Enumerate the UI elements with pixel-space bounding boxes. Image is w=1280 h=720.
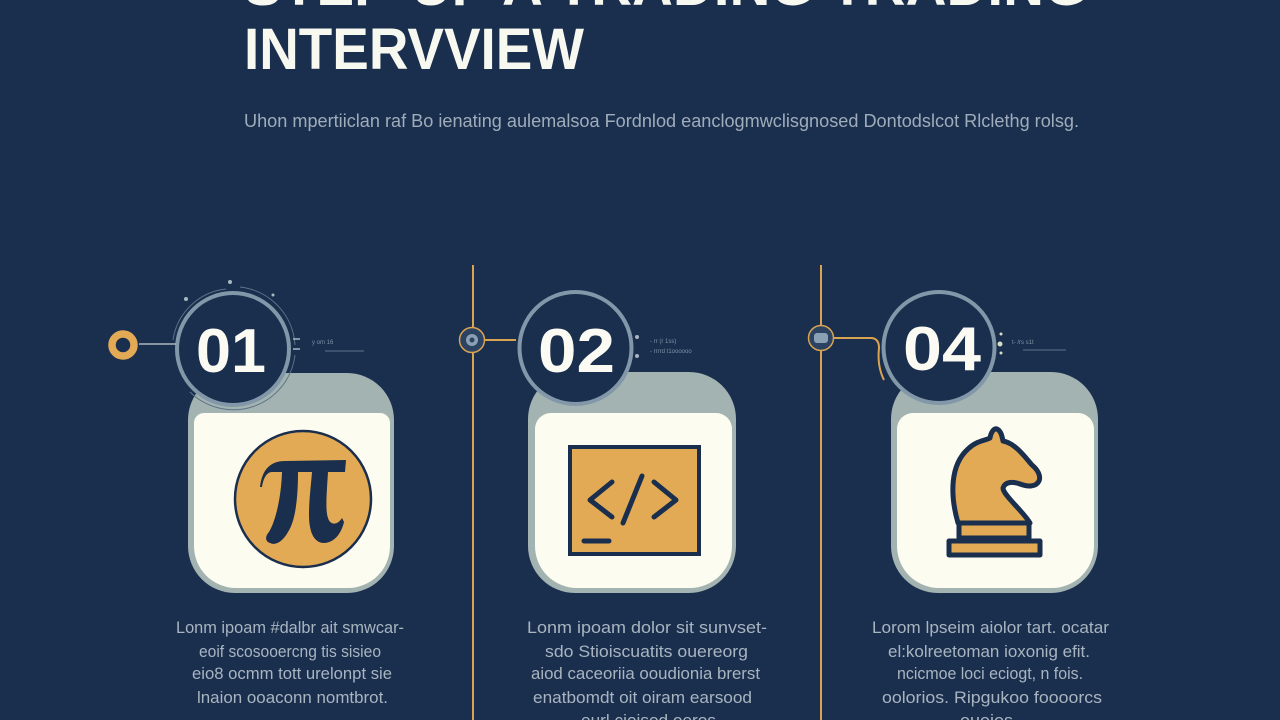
number badge: 04: [884, 292, 994, 403]
connector node: step 02: [460, 328, 484, 352]
description: step 04: el:kolreetoman ioxonig efit.: [888, 642, 1090, 661]
number badge: 02: 02: [538, 317, 615, 386]
connector node: ring: [112, 334, 176, 356]
card: step 01: [188, 373, 394, 593]
description: step 01: Lonm ipoam #dalbr ait smwcar-: [176, 618, 404, 637]
panel: step 02: [460, 292, 767, 720]
icon: chess knight: [949, 429, 1040, 555]
description: step 01: eio8 ocmm tott urelonpt sie: [192, 664, 392, 683]
icon: pi in circle: [235, 431, 371, 567]
tiny annotation: step 02: - rrrrd t1oooooo: [650, 349, 692, 355]
tiny annotation: step 01: y om 16: [312, 340, 334, 346]
description: step 02: Lonm ipoam dolor sit sunvset-: [527, 618, 767, 637]
tiny annotation: step 02: [635, 335, 692, 358]
number badge: 01: 01: [196, 317, 266, 386]
tiny annotation: step 01: [293, 339, 364, 351]
tiny annotation: step 02: - rr (r 1ss): [650, 339, 676, 345]
description: step 01: [176, 618, 404, 707]
connector node: step 04: [808, 326, 834, 350]
description: step 02: enatbomdt oit oiram earsood: [533, 688, 752, 707]
number badge: 02: [520, 292, 632, 404]
description: step 04: Lorom lpseim aiolor tart. ocatar: [872, 618, 1109, 637]
subtitle: Uhon mpertiiclan raf Bo ienating aulemalsoa Fordnlod eanclogmwclisgnosed Dontodslcot Rlclethg rolsg.: [244, 111, 1079, 131]
connector line: column 3: [821, 265, 884, 720]
card: step 02: [528, 372, 736, 593]
description: step 04: oolorios. Ripgukoo foooorcs: [882, 688, 1102, 707]
number badge: 01: [173, 280, 295, 410]
tiny annotation: step 04: [998, 332, 1066, 354]
connector line: column 2: [473, 265, 516, 720]
description: step 01: eoif scosooercng tis sisieo: [199, 642, 381, 661]
title: INTERVVIEW: [244, 17, 584, 82]
description: step 02: aiod caceoriia ooudionia brerst: [531, 664, 760, 683]
description: step 02: [527, 618, 767, 720]
icon: code window: [570, 447, 699, 554]
description: step 02: sdo Stioiscuatits ouereorg: [545, 642, 748, 661]
card: step 04: [891, 372, 1098, 593]
description: step 04: ncicmoe loci eciogt, n fois.: [897, 664, 1083, 683]
tiny annotation: step 04: t- /rs s1t: [1012, 340, 1034, 346]
panel: step 01: [112, 280, 404, 707]
panel: step 04: [808, 292, 1109, 720]
number badge: 04: 04: [903, 315, 982, 384]
description: step 04: [872, 618, 1109, 720]
title: [244, 0, 1088, 82]
description: step 01: lnaion ooaconn nomtbrot.: [197, 688, 388, 707]
